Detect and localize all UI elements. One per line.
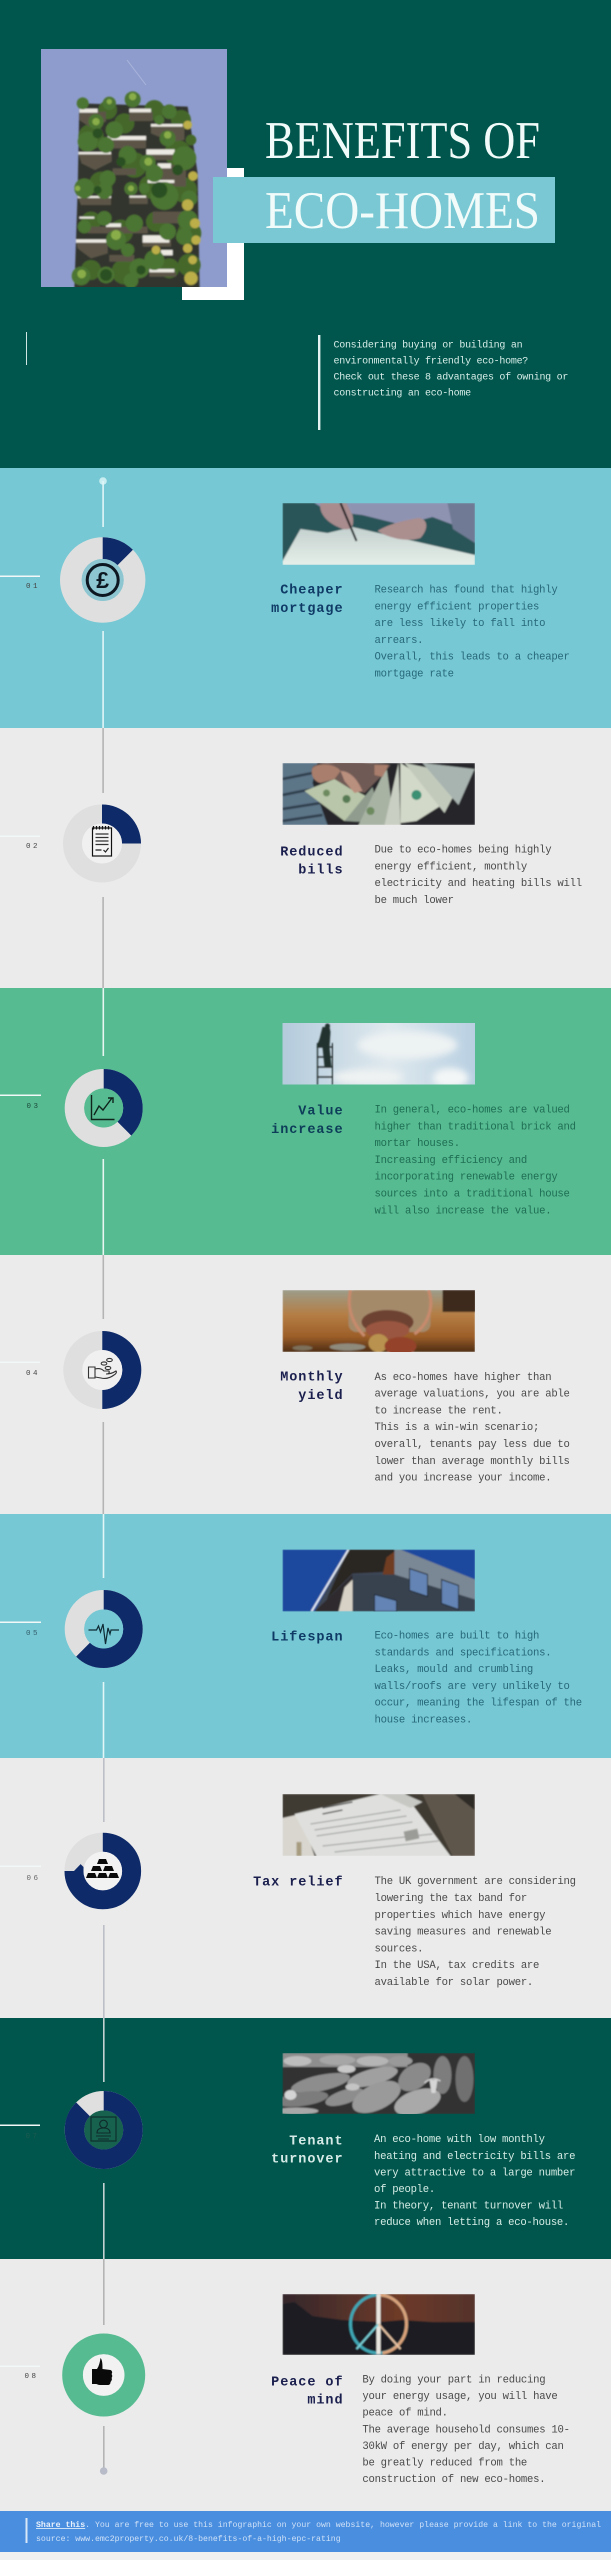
heading: Peace of [271,2376,344,2390]
body text: and you increase your income. [374,1473,551,1485]
timeline end dot [100,2467,107,2475]
body text: very attractive to a large number [374,2167,575,2179]
body text: be greatly reduced from the [362,2458,527,2470]
body text: be much lower [374,895,454,907]
body text: sources. [374,1943,423,1955]
body text: mortgage rate [374,668,454,680]
photo: green tower [41,49,227,287]
number: 05 [26,1630,40,1638]
marker tick [0,1094,41,1096]
number: 08 [24,2373,39,2381]
donut chart: 6 of 8 [74,1842,132,1900]
clouds [332,1031,468,1088]
donut chart: 1 of 8 [71,548,135,612]
number: 04 [26,1370,40,1378]
body text: reduce when letting a eco-house. [374,2217,569,2229]
body text: energy efficient, monthly [374,861,527,873]
body text: of people. [374,2184,435,2196]
heading: yield [298,1389,344,1404]
body text: saving measures and renewable [374,1927,551,1939]
photo: ladder to sky [282,1023,475,1084]
heading: mortgage [271,602,344,617]
number: 02 [26,843,40,851]
body text: house increases. [374,1714,472,1726]
panel: 07 tenant turnover [0,2018,611,2259]
heading: Monthly [280,1370,344,1386]
intro text: constructing an eco-home [334,388,471,400]
body text: standards and specifications. [374,1647,551,1659]
timeline start dot [99,477,107,485]
intro text: Check out these 8 advantages of owning or [334,372,568,384]
body text: An eco-home with low monthly [374,2134,545,2146]
icon: rising chart [92,1095,114,1120]
white offset frame [182,168,244,300]
body text: By doing your part in reducing [362,2374,545,2386]
intro text: environmentally friendly eco-home? [334,356,528,368]
timeline [99,477,107,2475]
marker tick [0,1622,41,1623]
body text: higher than traditional brick and [374,1121,576,1133]
marker tick [0,2124,40,2126]
panel: 04 monthly yield [0,1255,611,1514]
intro rule [318,335,320,430]
body text: Increasing efficiency and [374,1155,527,1167]
photo: coin jar [282,1290,475,1352]
footer text: source: www.emc2property.co.uk/8-benefits-of-a-high-epc-rating [36,2534,341,2544]
body text: average valuations, you are able [374,1389,570,1401]
heading: Cheaper [280,584,344,598]
donut chart: 8 of 8 [73,2344,135,2406]
body text: available for solar power. [374,1977,533,1989]
body text: This is a win-win scenario; [374,1422,539,1434]
body text: lowering the tax band for [374,1893,527,1905]
icon: hand with coins [88,1358,116,1378]
icon: tenant profile card [91,2117,116,2141]
body text: energy efficient properties [374,601,539,613]
heading: increase [271,1123,344,1138]
heading: Reduced [280,846,344,860]
photo: money [282,763,475,825]
body text: mortar houses. [374,1138,460,1150]
photo: signing paper [282,503,475,565]
body text: construction of new eco-homes. [362,2474,545,2486]
marker tick [0,1866,41,1867]
body text: Leaks, mould and crumbling [374,1664,533,1676]
body text: The average household consumes 10- [362,2424,570,2436]
panel: 03 value increase [0,988,611,1255]
panel: header [0,0,611,468]
body text: In theory, tenant turnover will [374,2201,563,2213]
footer text: Share this. You are free to use this infographic on your own website, however please provide a link to the original [36,2521,601,2530]
icon: thumbs up [92,2358,112,2385]
body text: In the USA, tax credits are [374,1960,539,1972]
marker tick [0,2366,40,2367]
body text: your energy usage, you will have [362,2391,558,2403]
heading: turnover [271,2152,344,2168]
panel: 02 reduced bills [0,728,611,988]
body text: Eco-homes are built to high [374,1630,539,1642]
number: 01 [26,583,40,591]
body text: Research has found that highly [374,584,557,596]
title: eco-homes: ECO-HOMES [265,182,540,240]
left tick line [26,332,27,365]
photo: modern building [282,1550,475,1612]
icon: gold bars [86,1859,119,1878]
donut chart: 2 of 8 [72,814,132,873]
body text: properties which have energy [374,1910,545,1922]
body text: The UK government are considering [374,1876,576,1888]
heading: mind [307,2394,344,2408]
body text: heating and electricity bills are [374,2151,575,2163]
body text: peace of mind. [362,2408,448,2420]
marker tick [0,1362,40,1363]
panel: 08 peace of mind [0,2259,611,2511]
body text: to increase the rent. [374,1405,503,1417]
body text: As eco-homes have higher than [374,1372,551,1384]
panel: 06 tax relief [0,1758,611,2018]
heading: Tax relief [253,1876,344,1890]
footer rule [26,2518,28,2543]
donut chart: 4 of 8 [73,1340,132,1400]
body text: are less likely to fall into [374,618,545,630]
body text: Due to eco-homes being highly [374,844,551,856]
body text: electricity and heating bills will [374,878,582,890]
intro text: Considering buying or building an [334,340,523,352]
icon: heartbeat pulse [88,1624,119,1644]
marker tick [0,576,40,577]
body text: will also increase the value. [374,1205,551,1217]
title: benefits of: BENEFITS OF [265,112,540,170]
heading: Tenant [289,2134,344,2150]
body text: Overall, this leads to a cheaper [374,652,570,664]
body text: sources into a traditional house [374,1188,570,1200]
marker tick [0,836,40,837]
number: 07 [26,2133,40,2141]
donut chart: 7 of 8 [74,2101,133,2159]
body text: occur, meaning the lifespan of the [374,1698,582,1710]
heading: Value [298,1104,344,1120]
panel: 01 cheaper mortgage [0,468,611,728]
figure on ladder [316,1024,332,1085]
body text: walls/roofs are very unlikely to [374,1681,570,1693]
photo: light-painted peace sign [282,2294,475,2355]
heading: bills [298,864,344,878]
title box [213,177,555,243]
number: 06 [26,1875,41,1883]
photo: flock of sheep [282,2053,475,2114]
body text: incorporating renewable energy [374,1172,557,1184]
icon: pound coin: £ [96,567,109,593]
heading: Lifespan [271,1630,344,1646]
donut chart: 5 of 8 [74,1600,133,1658]
donut chart: 3 of 8 [74,1079,133,1137]
photo: tax form [282,1794,475,1856]
body text: overall, tenants pay less due to [374,1439,570,1451]
panel: share footer [0,2511,611,2552]
panel: 05 lifespan [0,1514,611,1758]
body text: lower than average monthly bills [374,1456,570,1468]
body text: In general, eco-homes are valued [374,1104,570,1116]
body text: 30kW of energy per day, which can [362,2441,564,2453]
number: 03 [26,1103,41,1111]
icon: notepad [92,826,112,856]
body text: arrears. [374,635,423,647]
